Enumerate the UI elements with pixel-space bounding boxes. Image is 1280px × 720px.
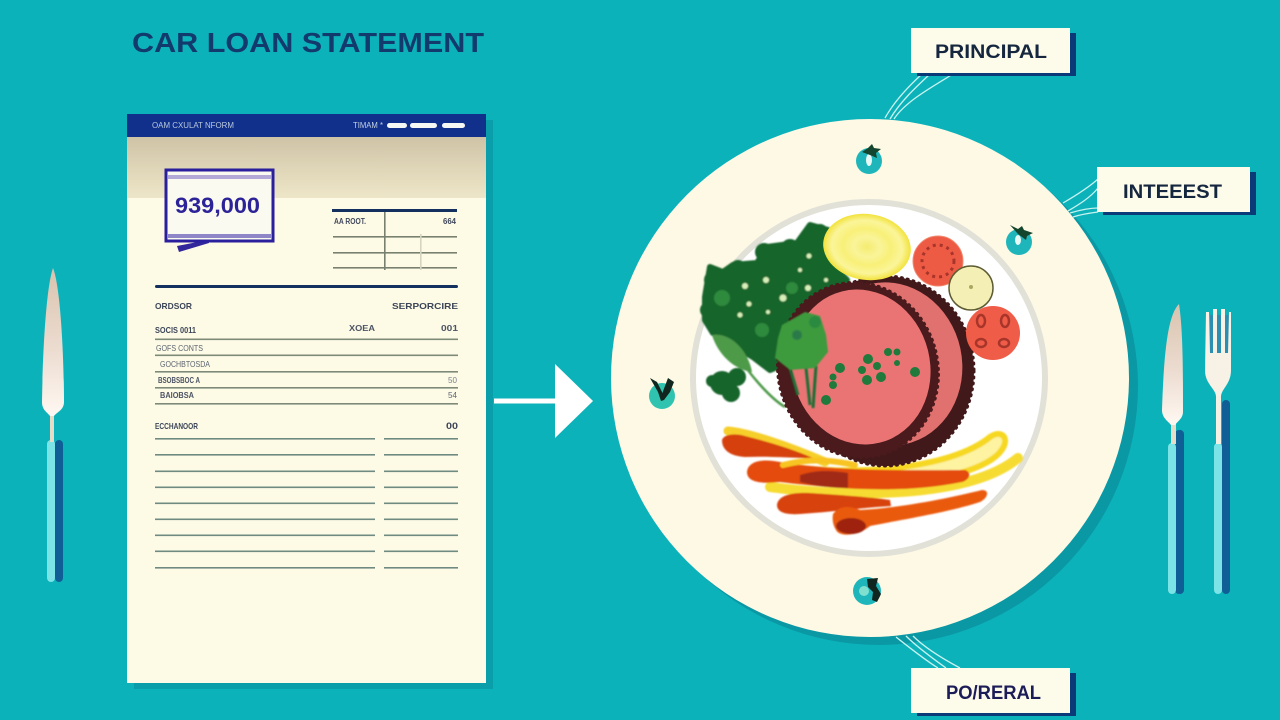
food: tomato slice right xyxy=(966,306,1020,360)
food: tomato slice top xyxy=(913,236,963,286)
summary table: AA ROOT. xyxy=(334,217,366,226)
charges table: XOEA xyxy=(349,323,375,333)
title: CAR LOAN STATEMENT xyxy=(132,27,484,58)
icon: fork xyxy=(1205,309,1231,594)
amount card: 939,000 xyxy=(175,193,260,218)
line items: ECCHANOOR xyxy=(155,421,198,431)
callout: bottom label: PO/RERAL xyxy=(946,683,1041,704)
callout: principal: PRINCIPAL xyxy=(935,42,1047,63)
charges table: 54 xyxy=(448,391,458,400)
amount card xyxy=(166,170,273,252)
callout connector: principal xyxy=(885,74,953,119)
charges table: BAIOBSA xyxy=(160,391,194,400)
callout connector: bottom xyxy=(896,636,960,668)
charges table: SERPORCIRE xyxy=(392,301,458,311)
food: carrots xyxy=(722,431,1018,535)
arrow xyxy=(494,364,593,438)
charges table: GOFS CONTS xyxy=(156,344,203,353)
summary table: 664 xyxy=(443,217,457,226)
plate xyxy=(611,119,1138,645)
food: meat front slice xyxy=(759,265,957,475)
charges table: 50 xyxy=(448,376,458,385)
panel: loan statement document xyxy=(127,114,493,689)
callout: principal xyxy=(911,28,1076,76)
marker: right xyxy=(1006,225,1033,255)
callout connector: interest xyxy=(1063,179,1098,217)
food: coriander sprig xyxy=(775,312,828,408)
food: meat back slice xyxy=(796,268,977,466)
callout: interest: INTEEEST xyxy=(1123,182,1222,203)
document header bar: OAM CXULAT NFORM xyxy=(152,121,234,130)
marker: left xyxy=(649,378,675,409)
document header bar: TIMAM * xyxy=(353,121,383,130)
document header bar xyxy=(127,114,486,137)
icon: left knife xyxy=(42,268,64,582)
charges table: GOCHBTOSDA xyxy=(160,360,211,369)
line items xyxy=(155,421,458,569)
charges table: SOCIS 0011 xyxy=(155,325,196,335)
food: lemon slice xyxy=(949,266,993,310)
food: yellow squash xyxy=(819,208,915,286)
charges table xyxy=(155,301,458,405)
line items: 00 xyxy=(446,421,458,431)
charges table: ORDSOR xyxy=(155,301,192,311)
callout: interest xyxy=(1097,167,1256,215)
charges table: 001 xyxy=(441,323,458,333)
summary table xyxy=(332,209,457,270)
food: parsley greens xyxy=(700,224,847,407)
marker: top xyxy=(856,144,882,174)
icon: right knife xyxy=(1162,304,1184,594)
callout: bottom label xyxy=(911,668,1076,716)
marker: bottom xyxy=(853,577,881,605)
charges table: BSOBSBOC A xyxy=(158,376,200,385)
